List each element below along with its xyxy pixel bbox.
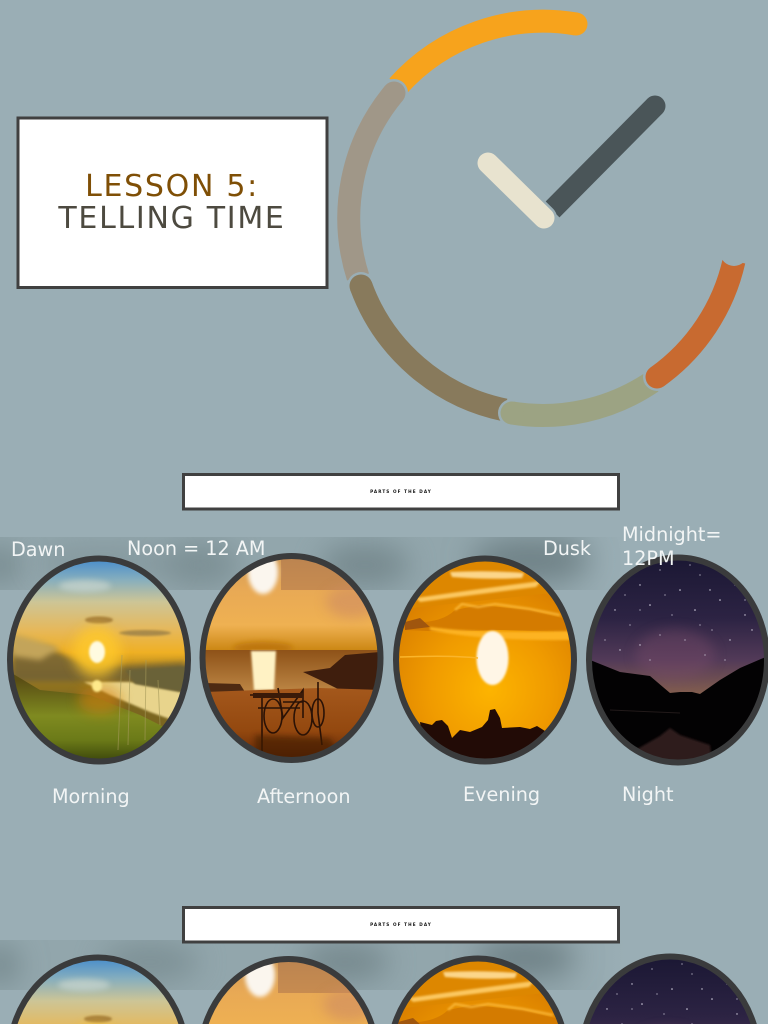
photo: afternoon	[200, 550, 384, 765]
label: evening: Evening	[463, 783, 540, 806]
clock ring	[347, 12, 748, 427]
photo row 2: night	[578, 953, 762, 1024]
ring segment: orange	[643, 238, 748, 391]
clock minute hand	[552, 96, 666, 210]
ring segment: amber	[398, 12, 588, 86]
label: morning: Morning	[52, 785, 130, 808]
title box	[18, 118, 327, 288]
label: dawn: Dawn	[11, 538, 65, 561]
heading text: lower: PARTS OF THE DAY	[370, 922, 432, 927]
shadow band: lower	[0, 938, 625, 990]
heading box: upper	[184, 474, 618, 509]
label: dusk: Dusk	[543, 537, 592, 560]
clock hour hand	[488, 163, 544, 218]
title: lesson number: LESSON 5:	[85, 169, 259, 204]
shadow band: upper	[0, 537, 625, 590]
heading text: PARTS OF THE DAY	[370, 489, 432, 494]
label: afternoon: Afternoon	[257, 785, 351, 808]
title: lesson name: TELLING TIME	[57, 201, 286, 236]
photo row 2: evening	[386, 956, 573, 1024]
photo: night	[586, 554, 768, 770]
heading box: lower	[184, 908, 618, 942]
label: night: Night	[622, 783, 674, 806]
label: midnight: 12PM	[622, 547, 675, 570]
photo row 2: afternoon	[197, 953, 381, 1024]
label: noon: Noon = 12 AM	[127, 537, 265, 560]
ring segment: olive	[498, 382, 652, 427]
label: midnight: Midnight=	[622, 523, 722, 546]
photo: evening	[393, 556, 580, 765]
ring segment: brown	[347, 272, 505, 410]
photo: morning	[5, 556, 191, 765]
photo row 2: morning	[4, 955, 190, 1024]
ring segment: taupe	[349, 79, 408, 277]
